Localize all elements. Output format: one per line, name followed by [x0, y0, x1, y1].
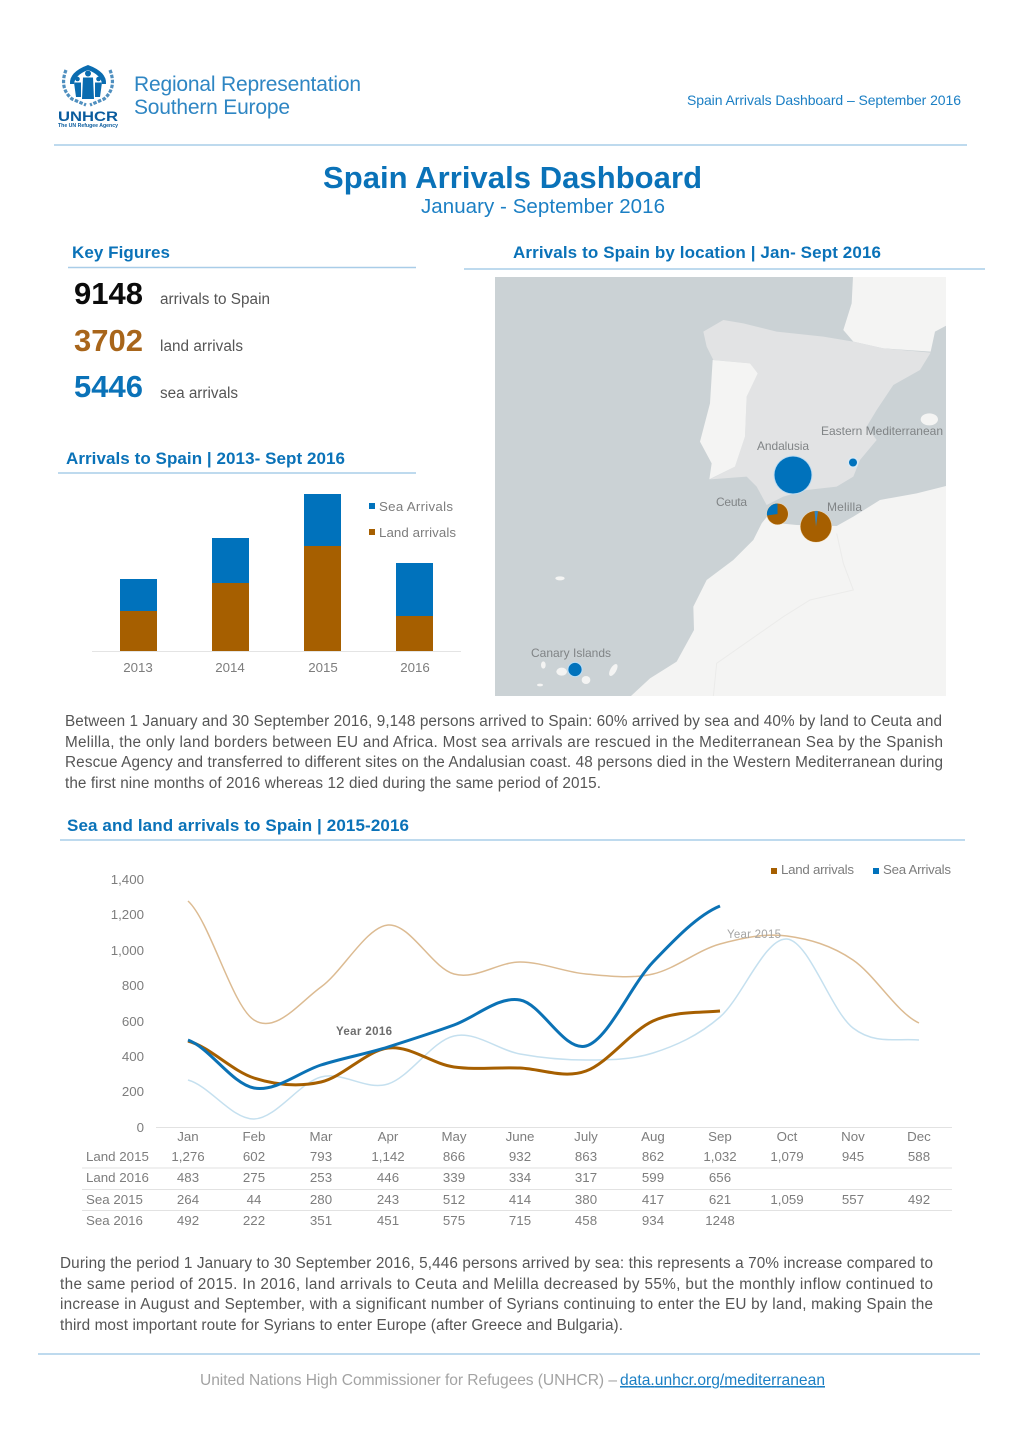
figure: sea arrivals: [74, 369, 238, 404]
line legend: Land arrivals: [781, 862, 854, 877]
y axis labels: 1,000: [111, 943, 144, 958]
table row: land 2016: 334: [509, 1170, 531, 1185]
table row: sea 2016: Sea 2016: [86, 1213, 143, 1228]
marker: Andalusia: Andalusia: [757, 439, 809, 453]
table row: land 2015: 602: [243, 1149, 265, 1164]
text block: summary paragraph: Between 1 January and 30 September 2016, 9,148 persons arrived to Spain: 60% arrived by sea and 40% by land to Ceuta and: [65, 713, 942, 730]
heading: key figures: Key Figures: [72, 243, 170, 262]
table header: months: May: [441, 1129, 467, 1144]
table header: months: Aug: [641, 1129, 665, 1144]
marker: Canary Islands: [531, 646, 611, 677]
table row: sea 2016: 492: [177, 1213, 199, 1228]
France: [844, 277, 946, 352]
table row: sea 2016: 1248: [705, 1213, 735, 1228]
table row: land 2015: 866: [443, 1149, 465, 1164]
table row: land 2016: 656: [709, 1170, 731, 1185]
table row: sea 2015: Sea 2015: [86, 1192, 143, 1207]
text block: summary paragraph: the first nine months of 2016 whereas 12 died during the same period of 2015.: [65, 775, 601, 792]
table row: land 2015: Land 2015: [86, 1149, 149, 1164]
marker: Eastern Mediterranean: [821, 424, 943, 468]
header report label: Spain Arrivals Dashboard – September 2016: [687, 92, 961, 108]
subtitle: January - September 2016: [421, 195, 665, 218]
footer: United Nations High Commissioner for Refugees (UNHCR) –: [200, 1372, 617, 1389]
table row: land 2016: 483: [177, 1170, 199, 1185]
organisation name: Southern Europe: [134, 96, 290, 119]
marker: Andalusia: [757, 439, 812, 494]
table row: sea 2015: 557: [842, 1192, 864, 1207]
heading: arrivals by location: Arrivals to Spain by location | Jan- Sept 2016: [513, 243, 881, 262]
bar axis labels: 2014: [215, 660, 245, 675]
line legend: Sea Arrivals: [883, 862, 951, 877]
text block: analysis paragraph: increase in August and September, with a significant number of Syrians continuing to enter the EU by land, making Spain the: [60, 1296, 933, 1313]
table row: land 2016: [86, 1170, 731, 1185]
table row: sea 2015: 1,059: [770, 1192, 804, 1207]
marker: Ceuta: Ceuta: [716, 495, 747, 509]
organisation name: Regional Representation: [134, 73, 361, 96]
panel: key figures: [68, 243, 416, 404]
table row: sea 2016: [86, 1213, 735, 1228]
bar legend: Sea Arrivals: [379, 499, 453, 514]
table row: sea 2016: 451: [377, 1213, 399, 1228]
label: year 2016: Year 2016: [336, 1026, 392, 1038]
figure: total arrivals: [74, 276, 270, 311]
table row: land 2016: 253: [310, 1170, 332, 1185]
table header: months: Sep: [708, 1129, 732, 1144]
figure: land arrivals: [74, 323, 243, 358]
figure: sea arrivals: 5446: [74, 369, 143, 404]
Spain: [703, 320, 931, 505]
table header: months: Nov: [841, 1129, 865, 1144]
text block: analysis paragraph: [60, 1255, 933, 1334]
table header: months: Jan: [177, 1129, 199, 1144]
panel: monthly line chart: [60, 816, 965, 1228]
heading: sea and land arrivals: Sea and land arrivals to Spain | 2015-2016: [67, 816, 409, 835]
bar 2015: [304, 494, 341, 651]
table header: months: June: [506, 1129, 534, 1144]
table row: land 2016: 275: [243, 1170, 265, 1185]
table header: months: Dec: [907, 1129, 931, 1144]
marker: Eastern Mediterranean: Eastern Mediterranean: [821, 424, 943, 438]
table header: months: Apr: [378, 1129, 399, 1144]
table row: land 2015: 945: [842, 1149, 864, 1164]
table row: land 2015: 862: [642, 1149, 664, 1164]
table row: sea 2016: 351: [310, 1213, 332, 1228]
footer link: data.unhcr.org/mediterranean: [620, 1372, 825, 1389]
text block: summary paragraph: Rescue Agency and transferred to different sites on the Andalusian coast. 48 persons died in the Western Mediterranean during: [65, 754, 943, 771]
label: year 2015: Year 2015: [727, 929, 781, 941]
table row: sea 2015: 417: [642, 1192, 664, 1207]
table row: land 2016: 446: [377, 1170, 399, 1185]
bar axis labels: [123, 660, 430, 675]
table header: months: July: [574, 1129, 598, 1144]
islands: [537, 413, 938, 686]
table row: sea 2015: 492: [908, 1192, 930, 1207]
bar 2013: [120, 579, 157, 651]
table row: sea 2015: 414: [509, 1192, 531, 1207]
icon: UNHCR logo: UNHCR: [58, 109, 118, 124]
bar legend: Land arrivals: [379, 525, 456, 540]
table row: land 2016: Land 2016: [86, 1170, 149, 1185]
y axis labels: 0: [137, 1120, 144, 1135]
figure: total arrivals: arrivals to Spain: [160, 291, 270, 308]
line: land arrivals 2015: [188, 901, 919, 1024]
bar axis labels: 2016: [400, 660, 430, 675]
figure: land arrivals: land arrivals: [160, 338, 243, 355]
y axis labels: 400: [122, 1049, 144, 1064]
text block: summary paragraph: Melilla, the only land borders between EU and Africa. Most sea arrivals are rescued in the Mediterranean Sea by the Spanish: [65, 734, 943, 751]
organisation name: [134, 73, 361, 119]
data table: [82, 1129, 952, 1228]
heading: arrivals to Spain 2013-2016: Arrivals to Spain | 2013- Sept 2016: [66, 449, 345, 468]
text block: analysis paragraph: the same period of 2015. In 2016, land arrivals to Ceuta and Melilla decreased by 55%, but the monthly inflow continued to: [60, 1276, 933, 1293]
bar axis labels: 2013: [123, 660, 153, 675]
y axis labels: 1,200: [111, 907, 144, 922]
table row: land 2015: 1,032: [703, 1149, 737, 1164]
bar axis labels: 2015: [308, 660, 338, 675]
table header: months: [177, 1129, 931, 1144]
marker: Melilla: Melilla: [827, 500, 862, 514]
table row: sea 2015: 264: [177, 1192, 199, 1207]
footer: [200, 1372, 825, 1389]
map: [495, 270, 957, 700]
header: [58, 65, 961, 129]
table row: land 2015: 793: [310, 1149, 332, 1164]
table header: months: Oct: [777, 1129, 798, 1144]
table row: land 2015: 863: [575, 1149, 597, 1164]
y axis labels: 1,400: [111, 872, 144, 887]
table row: sea 2016: 934: [642, 1213, 664, 1228]
table row: land 2016: 339: [443, 1170, 465, 1185]
y axis labels: 800: [122, 978, 144, 993]
table row: land 2015: 588: [908, 1149, 930, 1164]
table row: sea 2015: 512: [443, 1192, 465, 1207]
table row: sea 2015: 621: [709, 1192, 731, 1207]
table row: sea 2016: 575: [443, 1213, 465, 1228]
table row: land 2016: 599: [642, 1170, 664, 1185]
marker: Ceuta: [716, 495, 788, 525]
text block: summary paragraph: [65, 713, 943, 792]
table row: sea 2016: 715: [509, 1213, 531, 1228]
North Africa: [627, 483, 957, 700]
table row: sea 2015: 280: [310, 1192, 332, 1207]
figure: sea arrivals: sea arrivals: [160, 385, 238, 402]
table row: sea 2015: [86, 1192, 930, 1207]
text block: analysis paragraph: During the period 1 January to 30 September 2016, 5,446 persons arrived by sea: this represents a 70% increase compared to: [60, 1255, 933, 1272]
table row: sea 2015: 243: [377, 1192, 399, 1207]
table row: land 2016: 317: [575, 1170, 597, 1185]
figure: land arrivals: 3702: [74, 323, 143, 358]
panel: map of arrivals by location: [464, 243, 985, 700]
line legend: [771, 862, 951, 877]
y axis labels: 200: [122, 1084, 144, 1099]
title: Spain Arrivals Dashboard: [323, 160, 702, 195]
table header: months: Feb: [243, 1129, 265, 1144]
title: [323, 160, 702, 218]
table row: land 2015: 932: [509, 1149, 531, 1164]
table row: land 2015: 1,142: [371, 1149, 405, 1164]
table row: sea 2015: 44: [247, 1192, 261, 1207]
icon: UNHCR logo: The UN Refugee Agency: [58, 123, 118, 129]
text block: analysis paragraph: third most important route for Syrians to enter Europe (after Greece and Bulgaria).: [60, 1317, 623, 1334]
line: sea arrivals 2015: [188, 939, 919, 1119]
bar 2016: [396, 563, 433, 651]
bar legend: [369, 499, 456, 540]
table row: sea 2015: 380: [575, 1192, 597, 1207]
bar 2014: [212, 538, 249, 651]
table row: land 2015: [86, 1149, 930, 1164]
y axis labels: [111, 872, 144, 1135]
Portugal: [700, 360, 758, 479]
table row: land 2015: 1,079: [770, 1149, 804, 1164]
table row: sea 2016: 222: [243, 1213, 265, 1228]
y axis labels: 600: [122, 1014, 144, 1029]
panel: stacked bar chart 2013-2016: [58, 449, 461, 675]
figure: total arrivals: 9148: [74, 276, 143, 311]
line: sea arrivals 2016: [188, 906, 720, 1089]
line: land arrivals 2016: [188, 1011, 720, 1085]
icon: UNHCR logo: [58, 65, 118, 129]
table row: land 2015: 1,276: [171, 1149, 205, 1164]
marker: Melilla: [800, 500, 862, 542]
table header: months: Mar: [310, 1129, 333, 1144]
table row: sea 2016: 458: [575, 1213, 597, 1228]
marker: Canary Islands: Canary Islands: [531, 646, 611, 660]
